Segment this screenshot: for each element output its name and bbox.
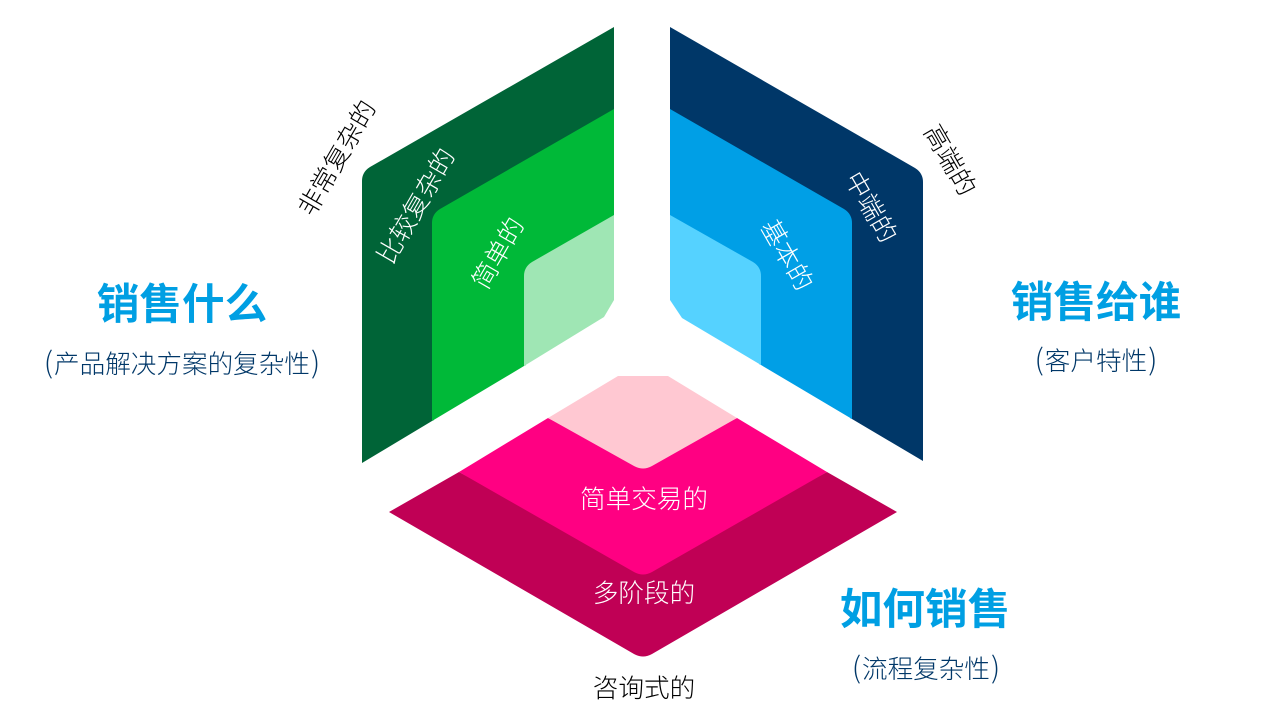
pink outer layer (389, 472, 897, 656)
label: very complex: 非常复杂的 (293, 96, 382, 221)
panel: what to sell (green) (293, 27, 614, 463)
label: multi stage: 多阶段的 (593, 579, 695, 608)
heading: how to sell: 如何销售 (840, 586, 1010, 634)
heading: who to sell to (1011, 279, 1181, 379)
panel: who to sell to (blue) (670, 27, 981, 461)
heading: how to sell (840, 586, 1010, 687)
heading: what to sell: 销售什么 (97, 281, 267, 329)
label: basic: 基本的 (755, 215, 818, 296)
green inner layer (524, 215, 614, 366)
blue inner layer (670, 215, 761, 365)
heading: what to sell: (产品解决方案的复杂性) (44, 340, 320, 382)
label: fairly complex: 比较复杂的 (372, 144, 461, 269)
pink middle layer (459, 418, 827, 574)
label: high end: 高端的 (918, 120, 981, 201)
green middle layer (432, 109, 614, 421)
label: simple transaction: 简单交易的 (580, 485, 708, 514)
heading: what to sell (44, 281, 320, 382)
heading: how to sell: (流程复杂性) (852, 645, 1000, 687)
heading: who to sell to: 销售给谁 (1011, 279, 1181, 327)
blue middle layer (670, 109, 852, 419)
label: mid end: 中端的 (839, 167, 902, 248)
label: simple: 简单的 (467, 213, 530, 294)
panel: how to sell (pink) (389, 376, 897, 703)
green outer layer (362, 27, 614, 463)
pink inner layer (548, 376, 737, 468)
blue outer layer (670, 27, 923, 461)
label: consultative: 咨询式的 (593, 674, 695, 703)
heading: who to sell to: (客户特性) (1035, 337, 1157, 379)
